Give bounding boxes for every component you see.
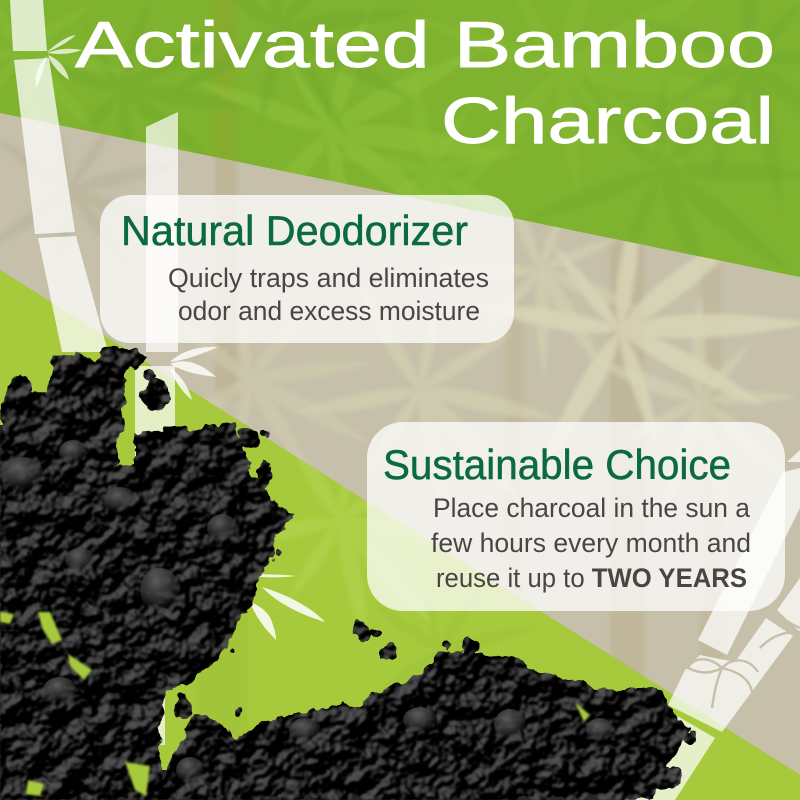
bamboo stalk: left — [10, 0, 108, 352]
charcoal powder: gaps in pile — [0, 612, 590, 796]
bamboo stalk: lower right — [625, 450, 800, 800]
icon: leaf spray lower left of card two — [248, 574, 325, 640]
heading: sustainable choice: Sustainable Choice — [383, 441, 731, 488]
title line one: Activated Bamboo — [75, 8, 775, 81]
charcoal powder: highlighted rocks — [0, 440, 614, 783]
title — [75, 8, 775, 157]
icon: leaf spray on left stalk — [35, 35, 82, 88]
text: sustainable line three: reuse it up to TWO YEARS — [436, 563, 747, 593]
card background one — [100, 195, 514, 343]
icon: leaf spray on lower right stalk — [688, 612, 800, 708]
icon: leaf spray on centre stalk — [170, 347, 218, 400]
text: sustainable line one: Place charcoal in the sun a — [433, 493, 751, 523]
charcoal powder: pile with stray particles — [0, 345, 696, 800]
card: natural deodorizer — [100, 195, 514, 343]
bamboo stalk: centre — [133, 112, 178, 745]
text: deodorizer line one: Quicly traps and eliminates — [168, 263, 489, 293]
charcoal powder: underlay at frame edges — [0, 425, 625, 800]
title line two: Charcoal — [441, 84, 774, 157]
card background two — [367, 422, 785, 611]
heading: natural deodorizer: Natural Deodorizer — [121, 207, 468, 254]
text: deodorizer line two: odor and excess moisture — [178, 296, 480, 326]
card: sustainable choice — [367, 422, 785, 611]
text: sustainable line two: few hours every month and — [431, 528, 751, 558]
background: lime green band — [0, 270, 800, 800]
background: green bamboo band — [170, 29, 781, 195]
